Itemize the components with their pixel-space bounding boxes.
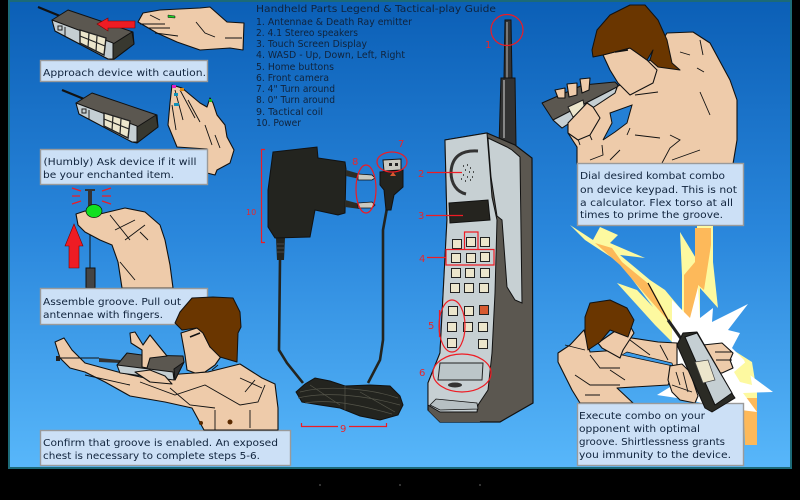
legend text block: 8. 0" Turn around	[256, 95, 335, 106]
legend text block: 5. Home buttons	[256, 62, 334, 73]
step 3 caption	[40, 288, 208, 324]
step 6 caption: opponent with optimal	[579, 424, 700, 435]
step 4 caption: chest is necessary to complete steps 5-6.	[43, 451, 260, 462]
legend text block: 2. 4.1 Stereo speakers	[256, 28, 358, 39]
legend text block: 6. Front camera	[256, 73, 329, 84]
step 5 caption: a calculator. Flex torso at all	[580, 198, 733, 209]
legend text block: Handheld Parts Legend & Tactical-play Guide	[256, 4, 496, 15]
legend text block: 4. WASD - Up, Down, Left, Right	[256, 50, 405, 61]
step 6 illustration: man striking	[558, 300, 733, 403]
legend text block: 1. Antennae & Death Ray emitter	[256, 17, 413, 28]
step 6 caption: Execute combo on your	[579, 411, 706, 422]
tilted phone in step 6	[648, 283, 735, 412]
speaker grille	[451, 151, 478, 194]
red part annotations: 7	[398, 139, 404, 150]
step 3 caption: antennae with fingers.	[43, 310, 163, 321]
step 2 caption: (Humbly) Ask device if it will	[44, 157, 196, 168]
step 5 caption	[578, 164, 744, 226]
step 3 caption: Assemble groove. Pull out	[43, 297, 181, 308]
step 5 caption: on device keypad. This is not	[580, 185, 737, 196]
red part annotations: 2	[418, 169, 424, 180]
red part annotations: 10	[246, 208, 256, 217]
step 2 caption	[40, 150, 208, 184]
step 2 caption: be your enchanted item.	[43, 170, 174, 181]
charger diagram	[268, 147, 403, 420]
bottom navigation dots	[319, 484, 481, 486]
step 1 caption	[40, 60, 208, 82]
red part annotations: 8	[352, 157, 358, 168]
step 1 illustration: approach device	[38, 7, 244, 60]
red part annotations	[246, 14, 523, 435]
step 5 illustration: man dialing keypad	[542, 5, 737, 164]
legend text block: 7. 4" Turn around	[256, 84, 335, 95]
lightning and impact burst	[570, 225, 773, 445]
step 4 caption: Confirm that groove is enabled. An exposed	[43, 438, 278, 449]
keypad	[448, 238, 490, 348]
red part annotations: 9	[340, 424, 346, 435]
step 2 illustration: ask device	[62, 85, 234, 175]
red part annotations: 6	[419, 368, 425, 379]
front camera panel	[438, 363, 483, 380]
step 4 caption	[40, 430, 290, 466]
step 1 caption: Approach device with caution.	[43, 68, 206, 79]
step 3 illustration: pull out antennae	[65, 188, 173, 288]
red part annotations: 5	[428, 321, 434, 332]
cable coil	[296, 378, 403, 420]
step 5 caption: Dial desired kombat combo	[580, 171, 725, 182]
red part annotations: 4	[419, 254, 425, 265]
legend text block	[256, 4, 496, 129]
step 4 illustration: man aiming device	[55, 297, 278, 430]
legend text block: 10. Power	[256, 118, 302, 129]
screen	[449, 200, 490, 223]
legend text block: 3. Touch Screen Display	[256, 39, 367, 50]
step 6 caption: you immunity to the device.	[579, 450, 731, 461]
red part annotations: 3	[418, 211, 424, 222]
step 6 caption: groove. Shirtlessness grants	[579, 437, 725, 448]
step 5 caption: times to prime the groove.	[580, 210, 723, 221]
main brick phone	[428, 20, 533, 422]
legend text block: 9. Tactical coil	[256, 107, 323, 118]
red part annotations: 1	[485, 40, 491, 51]
step 6 caption	[578, 404, 744, 466]
